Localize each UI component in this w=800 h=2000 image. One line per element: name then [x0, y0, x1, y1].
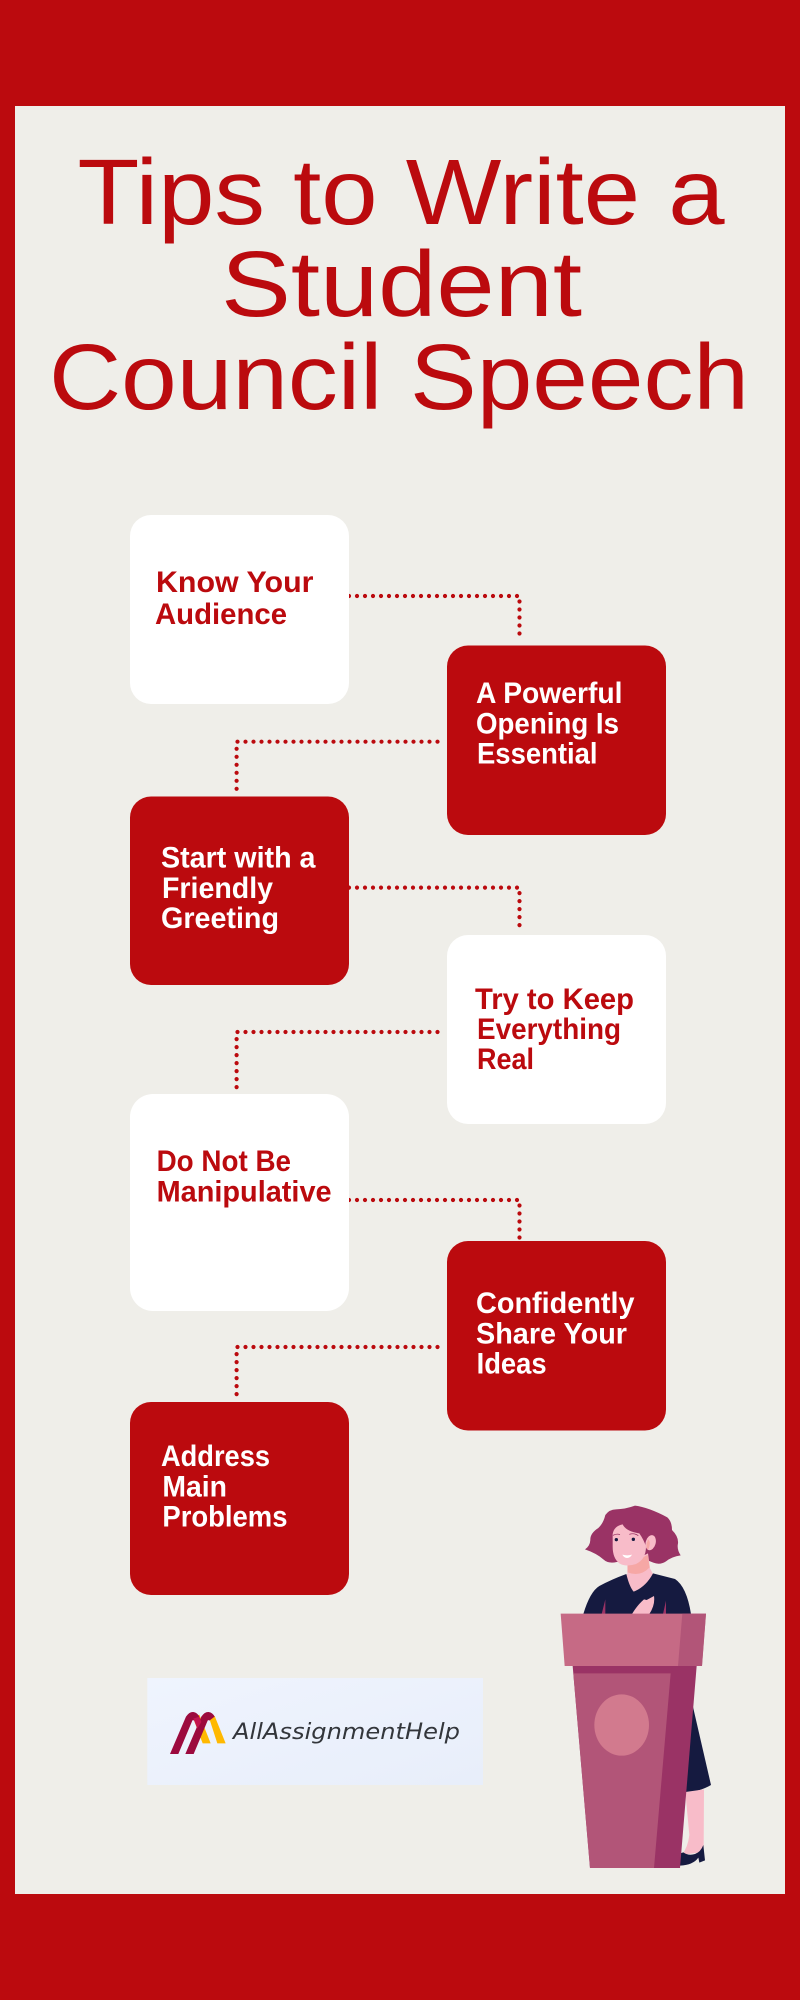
- title: Tips to Write a: [78, 140, 725, 244]
- shoe: [680, 1845, 705, 1866]
- connector: step 6 to step 7: [237, 1347, 438, 1402]
- smile: [622, 1555, 632, 1558]
- panel: Address Main Problems: [130, 1402, 349, 1595]
- panel: Try to Keep Everything Real: [447, 935, 666, 1124]
- connector: step 5 to step 6: [349, 1200, 520, 1241]
- panel: Try to Keep Everything Real: Everything: [477, 1013, 621, 1046]
- icon: logo mark: [170, 1712, 226, 1754]
- hand: [632, 1596, 654, 1614]
- panel: Do Not Be Manipulative: [130, 1094, 349, 1311]
- eyebrows: [613, 1534, 638, 1536]
- panel: A Powerful Opening Is Essential: Essential: [477, 738, 598, 771]
- figure: skirt, leg and shoe: [680, 1687, 711, 1866]
- podium column: [573, 1666, 697, 1868]
- hair: [585, 1506, 681, 1564]
- panel: Confidently Share Your Ideas: [447, 1241, 666, 1430]
- panel: Confidently Share Your Ideas: Confidently: [476, 1287, 635, 1320]
- logo: AllAssignmentHelp: [147, 1678, 483, 1785]
- sleeve creases: [602, 1599, 666, 1614]
- torso: [583, 1573, 691, 1614]
- panel: A Powerful Opening Is Essential: Opening Is: [476, 707, 619, 740]
- logo wordmark: AllAssignmentHelp: [231, 1719, 460, 1745]
- panel: Try to Keep Everything Real: Try to Keep: [475, 983, 634, 1016]
- title: [49, 140, 749, 429]
- skirt: [680, 1687, 711, 1794]
- connector: step 1 to step 2: [349, 596, 520, 637]
- podium: [561, 1614, 706, 1868]
- panel: Start with a Friendly Greeting: Friendly: [162, 872, 273, 905]
- connector: step 2 to step 3: [237, 742, 438, 790]
- panel: Start with a Friendly Greeting: Greeting: [161, 902, 279, 935]
- panel: A Powerful Opening Is Essential: A Powerful: [476, 677, 622, 710]
- title: Student: [221, 232, 582, 336]
- neck shadow: [628, 1555, 650, 1574]
- podium top side: [678, 1614, 706, 1666]
- panel: Address Main Problems: Address: [161, 1440, 270, 1473]
- figure: head and torso: [583, 1506, 691, 1614]
- connector: step 3 to step 4: [349, 888, 520, 928]
- panel: Start with a Friendly Greeting: Start with a: [161, 842, 316, 875]
- podium column front: [573, 1673, 671, 1868]
- title: Council Speech: [49, 325, 749, 429]
- panel: Start with a Friendly Greeting: [130, 796, 349, 985]
- panel: Confidently Share Your Ideas: Share Your: [476, 1317, 627, 1350]
- panel: Do Not Be Manipulative: Do Not Be: [157, 1145, 291, 1178]
- panel: Address Main Problems: Problems: [162, 1501, 288, 1534]
- ear: [644, 1534, 657, 1551]
- panel: Know Your Audience: Know Your: [156, 566, 314, 599]
- eyes: [615, 1538, 635, 1541]
- podium emblem: [594, 1694, 649, 1756]
- panel: Know Your Audience: Audience: [155, 598, 287, 631]
- panel: Know Your Audience: [130, 515, 349, 704]
- neck: [626, 1553, 653, 1592]
- panel: Confidently Share Your Ideas: Ideas: [477, 1347, 547, 1380]
- connector: step 4 to step 5: [237, 1032, 438, 1094]
- leg: [682, 1789, 704, 1855]
- panel: Try to Keep Everything Real: Real: [477, 1043, 534, 1076]
- panel: Do Not Be Manipulative: Manipulative: [157, 1176, 332, 1208]
- panel: A Powerful Opening Is Essential: [447, 646, 666, 835]
- illustration: woman at podium: [561, 1506, 711, 1868]
- face: [613, 1524, 646, 1566]
- podium top: [561, 1614, 706, 1666]
- panel: Address Main Problems: Main: [162, 1471, 227, 1504]
- ear shadow: [647, 1539, 650, 1549]
